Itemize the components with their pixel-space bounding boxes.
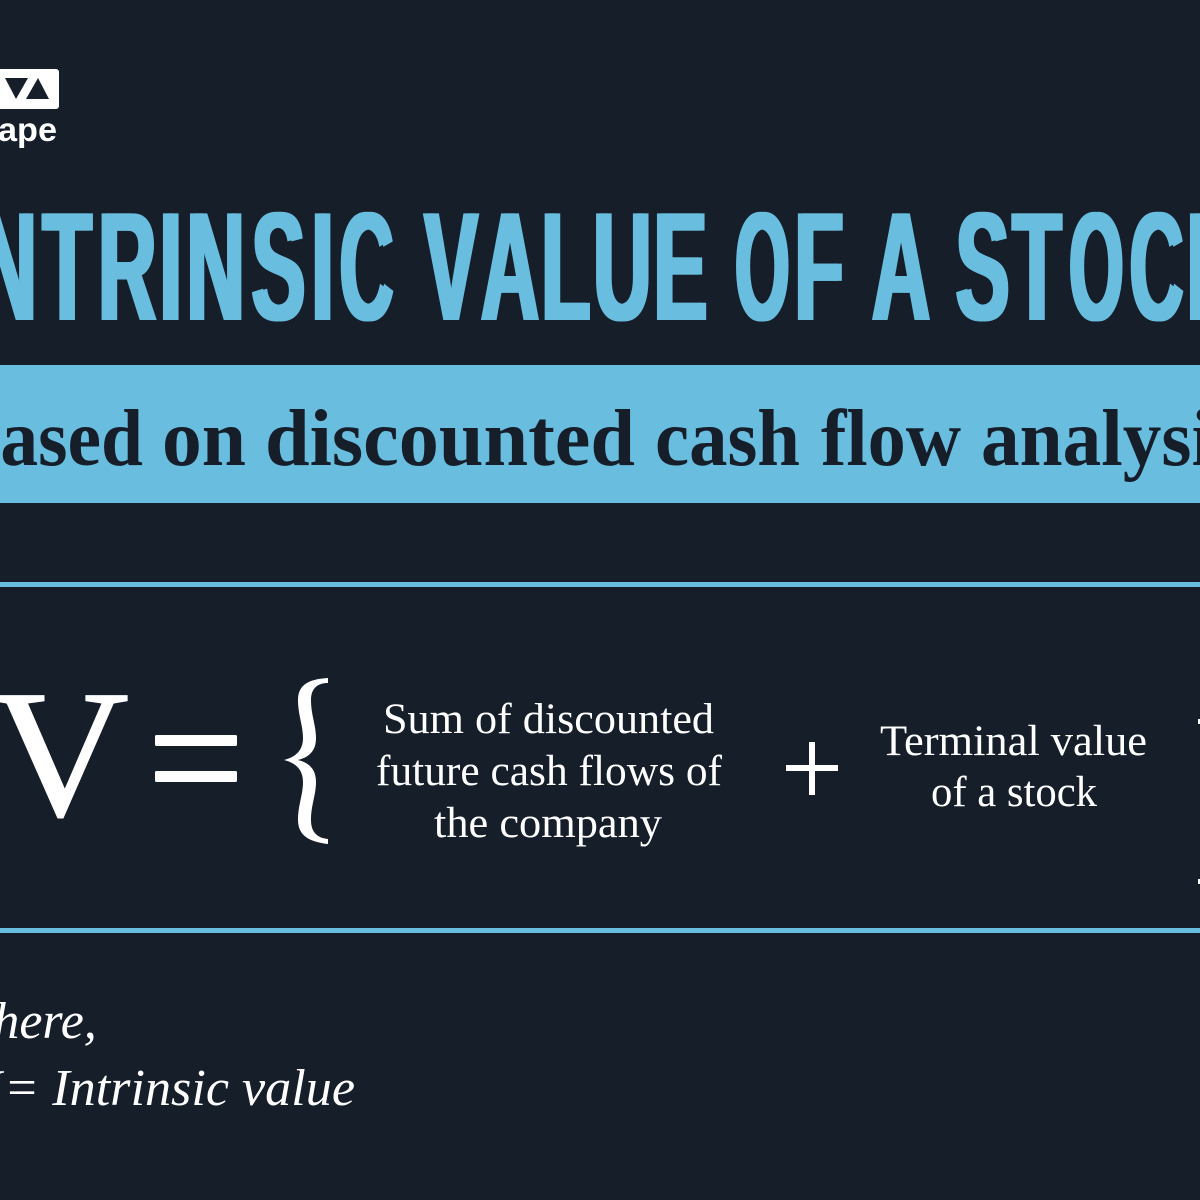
plus sign — [786, 742, 838, 795]
subtitle banner: discounted — [265, 395, 635, 483]
title: VALUE — [422, 181, 705, 354]
title: O — [1067, 181, 1121, 354]
left brace — [284, 678, 328, 844]
title: F — [792, 181, 842, 354]
title: C — [342, 180, 395, 353]
term: terminal value: of a stock — [931, 769, 1097, 816]
title: C — [338, 180, 391, 353]
title: ST — [954, 181, 1060, 354]
equals sign — [155, 735, 237, 782]
title: A — [870, 181, 928, 354]
term: sum of discounted cash flows: Sum of discounted — [383, 696, 714, 743]
formula panel — [0, 582, 1200, 933]
term: terminal value — [880, 718, 1147, 816]
term: sum of discounted cash flows — [376, 696, 723, 847]
term: sum of discounted cash flows: the company — [434, 800, 663, 847]
term: terminal value: Terminal value — [880, 718, 1147, 765]
logo — [0, 69, 59, 148]
title — [0, 180, 1200, 354]
title: O — [1071, 181, 1125, 354]
subtitle banner: cash — [655, 395, 800, 483]
definitions — [0, 993, 355, 1117]
title: O — [737, 181, 791, 354]
title: O — [733, 181, 787, 354]
subtitle banner — [0, 365, 1200, 503]
title: C — [1128, 180, 1181, 353]
title: ST — [958, 181, 1064, 354]
title: F — [796, 181, 846, 354]
title: C — [1132, 180, 1185, 353]
title: A — [874, 181, 932, 354]
definitions: = Intrinsic value — [4, 1060, 355, 1117]
title: VALUE — [426, 181, 709, 354]
subtitle banner: flow — [821, 395, 961, 483]
term: sum of discounted cash flows: future cash flows of — [376, 748, 723, 795]
subtitle banner: on — [162, 395, 246, 483]
right brace — [1198, 719, 1200, 884]
